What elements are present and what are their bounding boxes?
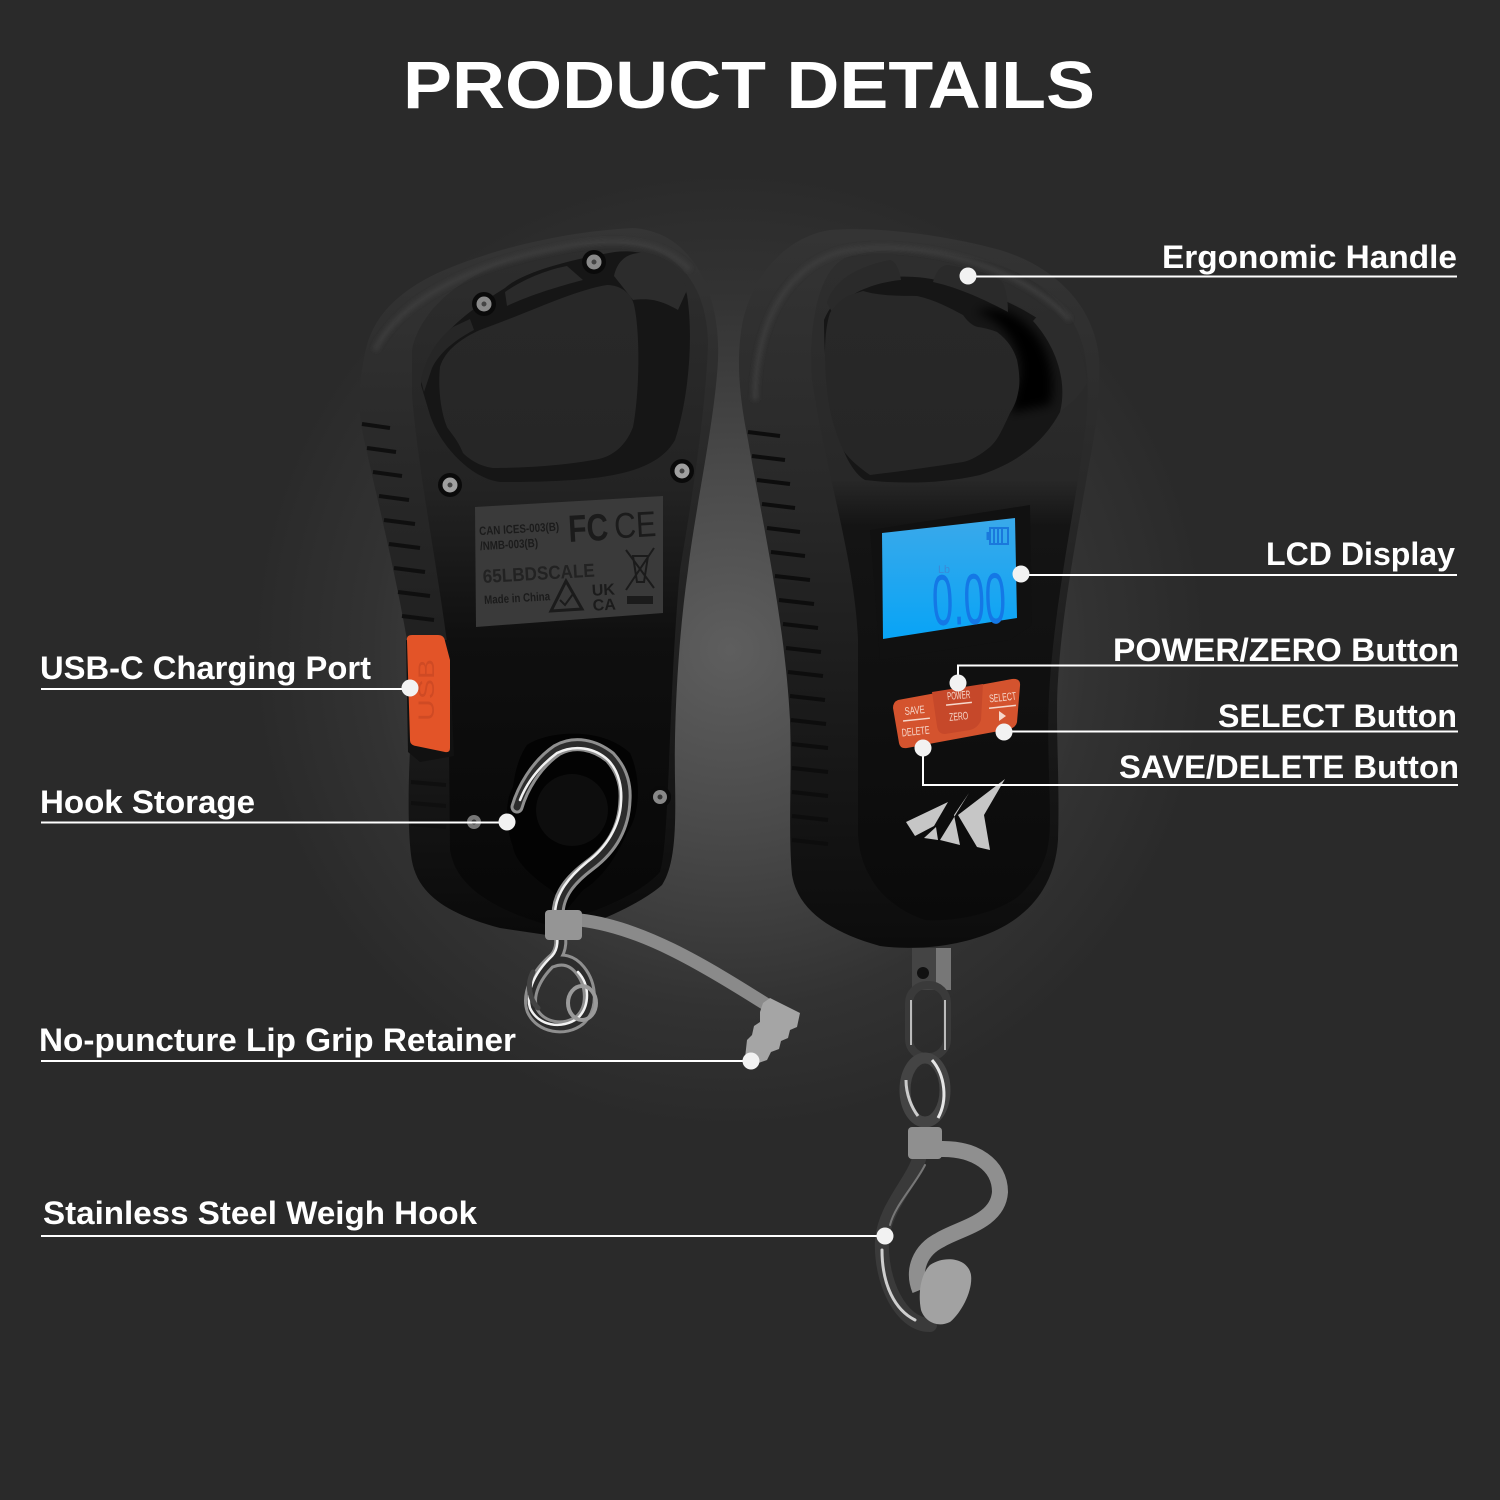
regulatory label plate: 65LBDSCALE [482, 561, 595, 588]
button panel: ZERO [949, 710, 969, 724]
callout: SELECT Button [996, 698, 1458, 740]
back handle rim [421, 251, 690, 482]
callout: USB-C Charging Port: USB-C Charging Port [40, 650, 371, 686]
callout: Ergonomic Handle [960, 239, 1457, 284]
LCD bezel [870, 505, 1032, 660]
LCD battery icon [988, 528, 1008, 544]
title: PRODUCT DETAILS [403, 48, 1095, 123]
back screws [438, 250, 694, 833]
lip grip retainer [545, 910, 800, 1066]
callout: USB-C Charging Port [40, 650, 418, 696]
button panel: POWER [947, 689, 971, 703]
front handle rim [824, 277, 1067, 483]
callout: SAVE/DELETE Button: SAVE/DELETE Button [1119, 749, 1459, 785]
back handle opening [439, 285, 638, 468]
callout: POWER/ZERO Button [950, 632, 1459, 692]
front body shell [739, 229, 1100, 948]
front panel [811, 250, 1088, 920]
callout: Hook Storage: Hook Storage [40, 784, 255, 820]
back inner plate [412, 243, 708, 925]
USB-C port cover [406, 635, 454, 762]
callout: Stainless Steel Weigh Hook: Stainless Steel Weigh Hook [43, 1195, 477, 1231]
back handle lugs [421, 253, 687, 392]
regulatory label plate: FC [567, 507, 609, 551]
callout: No-puncture Lip Grip Retainer [39, 1022, 760, 1070]
USB-C port cover: USB [414, 659, 439, 721]
regulatory label plate: CA [592, 596, 617, 615]
button panel: SELECT [989, 691, 1017, 705]
back body shell [359, 228, 718, 935]
front handle opening [825, 291, 1019, 475]
front side grip ribs [748, 432, 828, 844]
front handle lugs [827, 260, 1087, 412]
back view of the scale [359, 228, 800, 1066]
regulatory label plate: Made in China [484, 589, 551, 607]
regulatory label plate: CE [613, 503, 657, 546]
regulatory label plate: CAN ICES-003(B) [479, 520, 559, 538]
brand logo [906, 779, 1005, 850]
folded steel hook [517, 745, 625, 1027]
steel bracket [912, 948, 951, 990]
regulatory label plate [475, 496, 663, 627]
silicone hook retainer [908, 1127, 1000, 1324]
callout: No-puncture Lip Grip Retainer: No-puncture Lip Grip Retainer [39, 1022, 516, 1058]
front rim highlight [755, 248, 1070, 400]
callout: SELECT Button: SELECT Button [1218, 698, 1457, 734]
callout: SAVE/DELETE Button [914, 740, 1459, 785]
button panel: DELETE [901, 725, 930, 739]
POWER/ZERO key [932, 684, 983, 734]
hook recess [507, 734, 638, 915]
callout: LCD Display [1012, 536, 1457, 582]
back side grip ribs [362, 424, 446, 827]
LCD display: Lb [938, 564, 950, 576]
regulatory label plate: /NMB-003(B) [480, 536, 538, 553]
steel links [905, 985, 947, 1122]
callout: Ergonomic Handle: Ergonomic Handle [1162, 239, 1457, 275]
front view of the scale [739, 229, 1100, 1325]
LCD display: 0.00 [931, 559, 1007, 641]
callout: LCD Display: LCD Display [1266, 536, 1455, 572]
weigh hook [882, 1155, 930, 1325]
regulatory label plate: UK [591, 581, 616, 600]
callout: Hook Storage [40, 784, 516, 830]
button panel [893, 679, 1020, 748]
LCD display [882, 518, 1017, 641]
callout: POWER/ZERO Button: POWER/ZERO Button [1113, 632, 1459, 668]
button panel: SAVE [904, 704, 925, 718]
back rim highlight [375, 242, 690, 350]
callout: Stainless Steel Weigh Hook [41, 1195, 894, 1244]
